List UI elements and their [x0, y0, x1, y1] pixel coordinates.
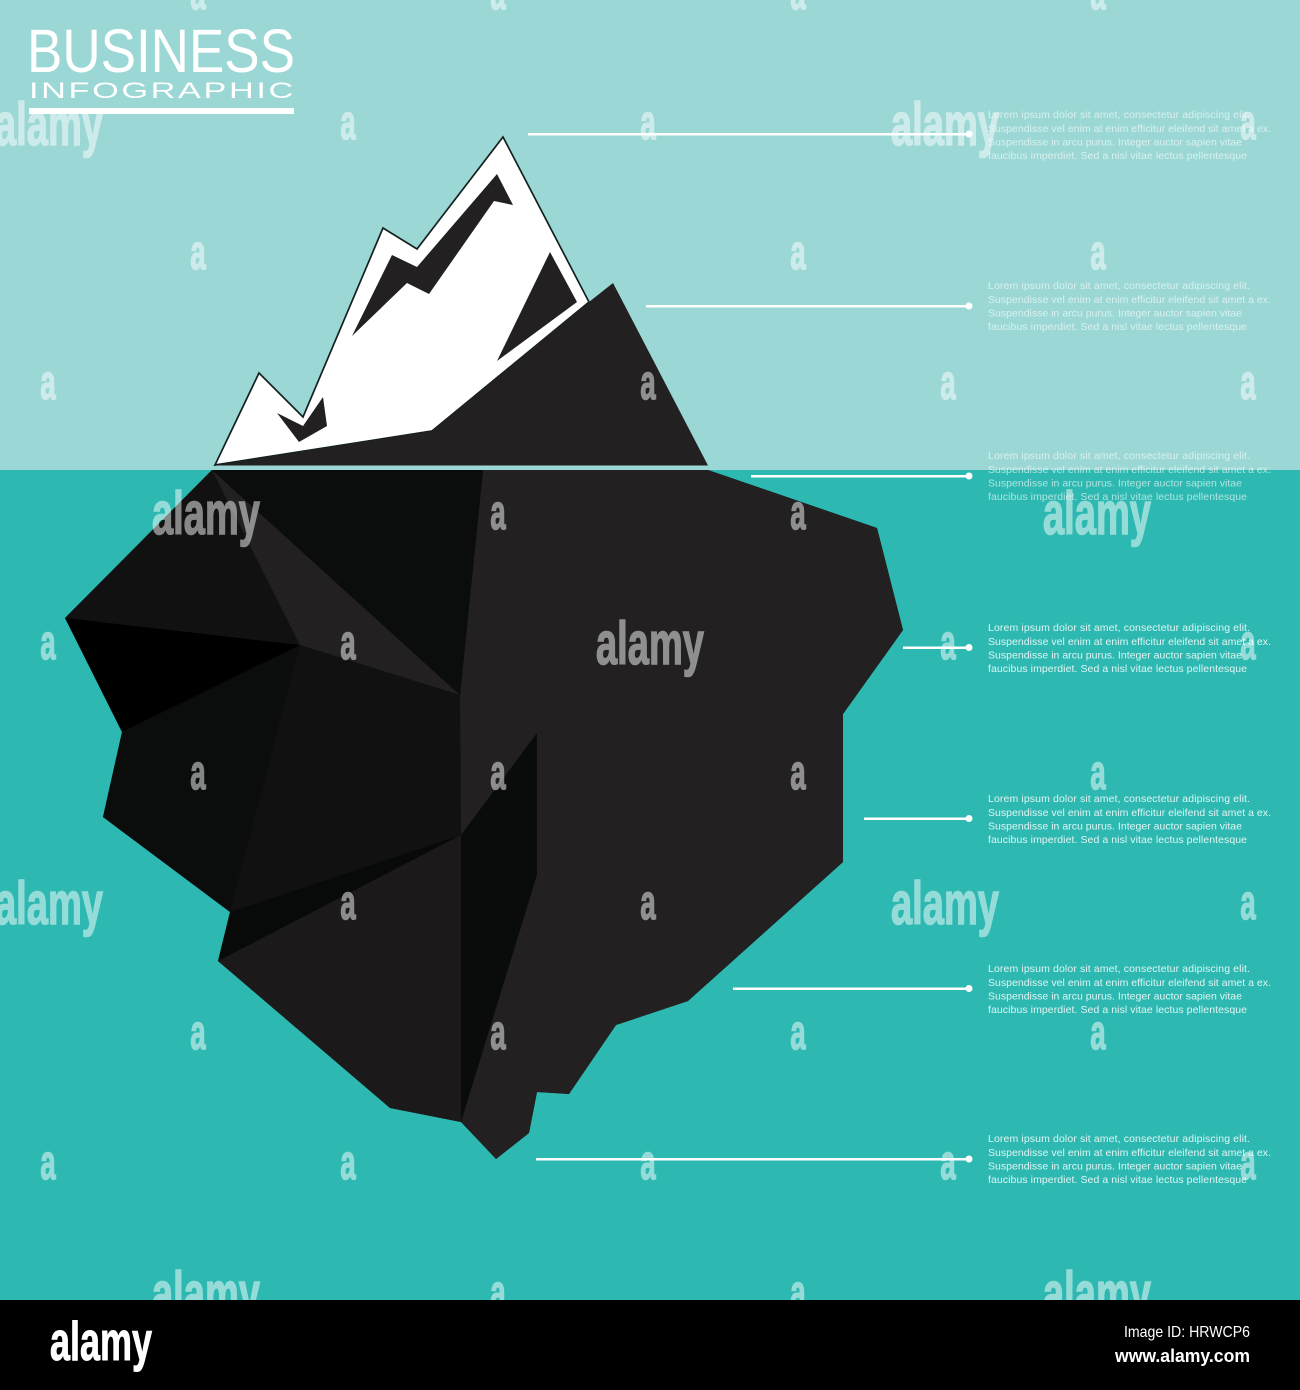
small watermark letters: a	[940, 616, 956, 670]
text block 2: Suspendisse vel enim at enim efficitur eleifend sit amet a ex.	[988, 294, 1271, 306]
lower left facet	[103, 645, 300, 912]
dark vertical strip facet	[461, 733, 537, 1122]
small watermark letters: a	[1240, 96, 1256, 150]
text block 2: Lorem ipsum dolor sit amet, consectetur adipiscing elit.	[988, 280, 1250, 292]
leader line 5	[864, 815, 972, 822]
centre facet	[230, 645, 461, 912]
text block 3: Lorem ipsum dolor sit amet, consectetur adipiscing elit.	[988, 450, 1250, 462]
bottom facet	[218, 835, 461, 1122]
text block 4	[988, 622, 1271, 675]
large watermark words: alamy	[0, 870, 103, 937]
footer logo: alamy	[50, 1310, 152, 1372]
text block 6: Suspendisse vel enim at enim efficitur eleifend sit amet a ex.	[988, 977, 1271, 989]
small watermark letters: a	[190, 1006, 206, 1060]
callout 2	[646, 280, 1271, 333]
small watermark letters: a	[190, 746, 206, 800]
large watermark words: alamy	[1043, 480, 1151, 547]
text block 3: Suspendisse in arcu purus. Integer auctor sapien vitae	[988, 478, 1242, 490]
text block 2: faucibus imperdiet. Sed a nisl vitae lectus pellentesque	[988, 321, 1247, 333]
small watermark letters: a	[340, 616, 356, 670]
title: business: BUSINESS	[27, 17, 295, 85]
small watermark letters: a	[790, 1266, 806, 1320]
text block 4: Suspendisse in arcu purus. Integer auctor sapien vitae	[988, 650, 1242, 662]
text block 5: Lorem ipsum dolor sit amet, consectetur adipiscing elit.	[988, 793, 1250, 805]
callout 6	[733, 963, 1271, 1016]
small watermark letters: a	[40, 356, 56, 410]
text block 1: faucibus imperdiet. Sed a nisl vitae lectus pellentesque	[988, 150, 1247, 162]
white snow cap	[215, 137, 589, 465]
callout 3	[751, 450, 1271, 503]
text block 1: Lorem ipsum dolor sit amet, consectetur adipiscing elit.	[988, 109, 1250, 121]
text block 4: faucibus imperdiet. Sed a nisl vitae lectus pellentesque	[988, 663, 1247, 675]
text block 7	[988, 1133, 1271, 1186]
text block 5	[988, 793, 1271, 846]
large watermark words: alamy	[1043, 1260, 1151, 1327]
iceberg above water	[215, 137, 708, 466]
small watermark letters: a	[790, 1006, 806, 1060]
right main face	[460, 470, 903, 1159]
text block 6	[988, 963, 1271, 1016]
text block 3: faucibus imperdiet. Sed a nisl vitae lectus pellentesque	[988, 491, 1247, 503]
small watermark letters: a	[490, 1006, 506, 1060]
text block 1: Suspendisse in arcu purus. Integer auctor sapien vitae	[988, 136, 1242, 148]
small watermark letters: a	[340, 1136, 356, 1190]
title	[27, 17, 296, 114]
light diagonal facet	[212, 470, 460, 695]
text block 1: Suspendisse vel enim at enim efficitur eleifend sit amet a ex.	[988, 123, 1271, 135]
small watermark letters: a	[1240, 356, 1256, 410]
large watermark words: alamy	[0, 91, 103, 158]
small watermark letters: a	[640, 876, 656, 930]
small watermark letters: a	[940, 356, 956, 410]
leader line 3	[751, 472, 972, 480]
image id: Image ID: HRWCP6	[1124, 1324, 1250, 1341]
small watermark letters: a	[490, 486, 506, 540]
title underline	[29, 108, 294, 114]
callout 7	[536, 1133, 1271, 1186]
top left facet	[65, 470, 300, 645]
title: infographic: INFOGRAPHIC	[29, 79, 296, 103]
website: www.alamy.com	[1114, 1346, 1250, 1366]
small watermark letters: a	[340, 876, 356, 930]
small watermark letters: a	[640, 1136, 656, 1190]
small watermark letters: a	[1240, 876, 1256, 930]
small watermark letters: a	[640, 96, 656, 150]
underwater silhouette	[65, 470, 903, 1159]
leader line 6	[733, 985, 972, 992]
leader line 2	[646, 302, 972, 310]
leader line 1	[528, 130, 972, 138]
text block 6: faucibus imperdiet. Sed a nisl vitae lectus pellentesque	[988, 1004, 1247, 1016]
large watermark words: alamy	[891, 91, 999, 158]
large watermark words: alamy	[596, 610, 704, 677]
small watermark letters: a	[790, 486, 806, 540]
text block 2: Suspendisse in arcu purus. Integer auctor sapien vitae	[988, 308, 1242, 320]
large watermark words: alamy	[152, 1260, 260, 1327]
small watermark letters: a	[1240, 1136, 1256, 1190]
text block 5: Suspendisse vel enim at enim efficitur eleifend sit amet a ex.	[988, 807, 1271, 819]
text block 4: Suspendisse vel enim at enim efficitur eleifend sit amet a ex.	[988, 636, 1271, 648]
text block 4: Lorem ipsum dolor sit amet, consectetur adipiscing elit.	[988, 622, 1250, 634]
small watermark letters: a	[940, 1136, 956, 1190]
small watermark letters: a	[190, 226, 206, 280]
footer background	[0, 1300, 1300, 1390]
text block 5: faucibus imperdiet. Sed a nisl vitae lectus pellentesque	[988, 834, 1247, 846]
text block 3: Suspendisse vel enim at enim efficitur eleifend sit amet a ex.	[988, 464, 1271, 476]
top centre facet	[212, 470, 483, 695]
small watermark letters: a	[340, 96, 356, 150]
text block 2	[988, 280, 1271, 333]
thin sliver facet	[218, 835, 461, 961]
text block 7: faucibus imperdiet. Sed a nisl vitae lectus pellentesque	[988, 1174, 1247, 1186]
large watermark words: alamy	[152, 480, 260, 547]
small watermark letters: a	[1090, 746, 1106, 800]
lower snow shadow	[277, 397, 327, 442]
upper snow shadow	[352, 174, 513, 336]
small watermark letters: a	[340, 356, 356, 410]
iceberg below water	[65, 470, 903, 1159]
text block 3	[988, 450, 1271, 503]
sea background	[0, 470, 1300, 1300]
text block 5: Suspendisse in arcu purus. Integer auctor sapien vitae	[988, 820, 1242, 832]
small watermark letters: a	[40, 616, 56, 670]
small watermark letters: a	[1090, 1006, 1106, 1060]
small watermark letters: a	[490, 746, 506, 800]
text block 1	[988, 109, 1271, 162]
text block 7: Suspendisse vel enim at enim efficitur eleifend sit amet a ex.	[988, 1147, 1271, 1159]
callout 5	[864, 793, 1271, 846]
callout 4	[903, 622, 1271, 675]
large watermark words: alamy	[891, 870, 999, 937]
large watermark words	[0, 91, 1151, 1327]
text block 6: Lorem ipsum dolor sit amet, consectetur adipiscing elit.	[988, 963, 1250, 975]
text block 6: Suspendisse in arcu purus. Integer auctor sapien vitae	[988, 990, 1242, 1002]
small watermark letters: a	[790, 226, 806, 280]
small watermark letters: a	[1240, 616, 1256, 670]
dark rock above water	[215, 283, 708, 466]
small watermark letters: a	[40, 1136, 56, 1190]
small watermark letters: a	[490, 1266, 506, 1320]
footer bar	[0, 1300, 1300, 1390]
black left facet	[65, 618, 300, 732]
sky background	[0, 0, 1300, 470]
text block 7: Lorem ipsum dolor sit amet, consectetur adipiscing elit.	[988, 1133, 1250, 1145]
right snow shadow	[497, 252, 577, 361]
small watermark letters: a	[790, 746, 806, 800]
leader line 7	[536, 1156, 972, 1162]
leader line 4	[903, 644, 972, 651]
text block 7: Suspendisse in arcu purus. Integer auctor sapien vitae	[988, 1160, 1242, 1172]
callout 1	[528, 109, 1271, 162]
small watermark letters: a	[1090, 226, 1106, 280]
small watermark letters: a	[640, 356, 656, 410]
